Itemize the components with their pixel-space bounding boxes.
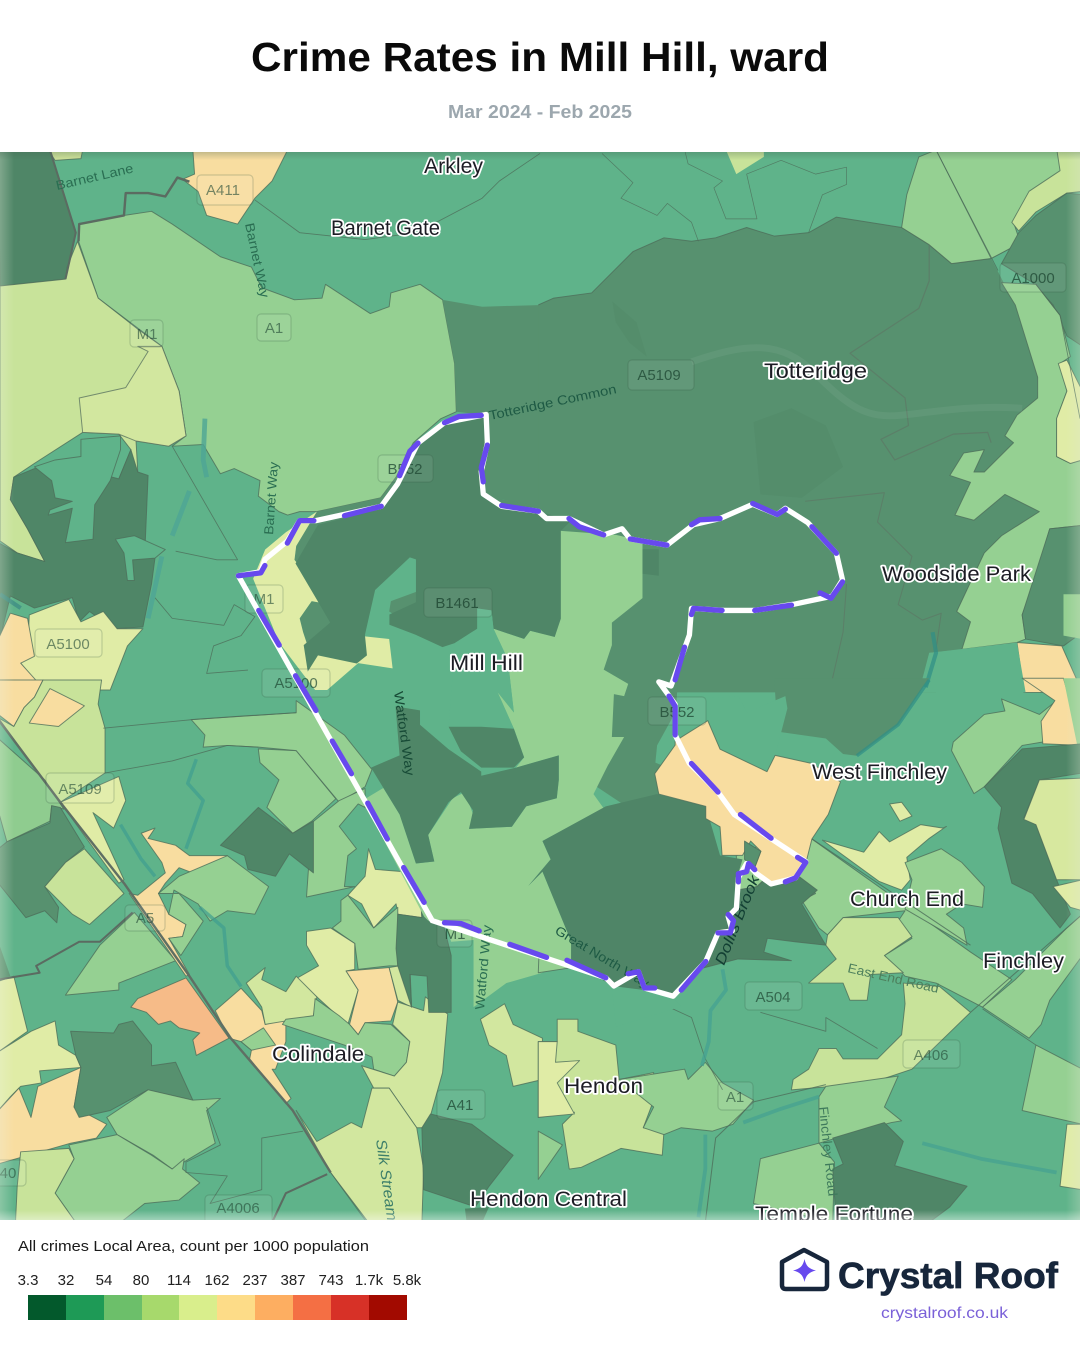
road: Dollis Brook: Dollis Brook [712, 871, 764, 967]
badge M1 [130, 320, 163, 347]
road badges [0, 175, 1066, 1225]
badge M1: M1 [445, 926, 465, 943]
badge M1: M1 [137, 326, 157, 343]
place: Hendon: Hendon [564, 1075, 643, 1098]
badge A5100: A5100 [274, 675, 318, 692]
icon: house with star [782, 1250, 827, 1289]
badge A5109: A5109 [637, 367, 681, 384]
place: Barnet Gate: Barnet Gate [331, 217, 440, 240]
badge A4006 [205, 1195, 272, 1225]
badge B552 [378, 455, 433, 482]
badge B552 [648, 697, 706, 725]
legend colour scale [28, 1295, 407, 1320]
road: Finchley Road: Finchley Road [816, 1106, 840, 1197]
badge M1 [245, 585, 283, 613]
road: Barnet Way north: Barnet Way [242, 222, 273, 300]
badge A1000: A1000 [1011, 270, 1055, 287]
badge A5100: A5100 [46, 636, 90, 653]
badge A1 [718, 1082, 753, 1110]
legend values [18, 1272, 422, 1289]
badge A504 [745, 982, 802, 1010]
road: Watford Way north: Watford Way [391, 690, 418, 777]
badge B1461 [424, 588, 492, 617]
white outline [238, 414, 843, 996]
badge B1461: B1461 [435, 595, 479, 612]
date range: Mar 2024 - Feb 2025 [448, 102, 632, 122]
badge A411: A411 [206, 182, 240, 199]
road: Great North Way: Great North Way [552, 923, 652, 991]
badge A41: A41 [447, 1097, 473, 1114]
legend title: All crimes Local Area, count per 1000 population [18, 1239, 369, 1255]
badge B552: B552 [659, 704, 695, 721]
legend values: 743 [318, 1272, 344, 1289]
website: crystalroof.co.uk [881, 1305, 1009, 1322]
badge A1: A1 [265, 320, 283, 337]
place: Mill Hill: Mill Hill [450, 652, 523, 675]
badge A1: A1 [726, 1089, 744, 1106]
legend values: 162 [204, 1272, 230, 1289]
road: Totteridge Common: Totteridge Common [488, 381, 618, 423]
legend values: 1.7k [355, 1272, 384, 1289]
place: Woodside Park: Woodside Park [882, 563, 1032, 586]
title [0, 0, 1080, 152]
legend values: 3.3 [18, 1272, 38, 1289]
legend values: 54 [96, 1272, 112, 1289]
purple dashes [238, 415, 843, 990]
badge 40: 40 [0, 1165, 16, 1182]
badge A5109 [46, 773, 114, 803]
place: Arkley: Arkley [424, 155, 483, 178]
badge A1 [257, 314, 291, 341]
badge B552: B552 [387, 461, 423, 478]
place names [272, 155, 1065, 1226]
road: Barnet Lane: Barnet Lane [54, 161, 135, 193]
place: Colindale: Colindale [272, 1043, 364, 1066]
badge A5: A5 [136, 910, 154, 927]
wordmark: Crystal Roof [838, 1255, 1059, 1296]
badge A5 [125, 905, 165, 931]
road: Barnet Way south: Barnet Way [261, 461, 281, 535]
badge A406: A406 [913, 1047, 949, 1064]
legend values: 80 [133, 1272, 149, 1289]
place: West Finchley: West Finchley [812, 761, 947, 784]
road: Watford Way south: Watford Way [472, 924, 494, 1010]
badge A1000 [1000, 263, 1066, 292]
heading: Crime Rates in Mill Hill, ward [251, 34, 829, 80]
legend values: 114 [167, 1272, 191, 1289]
badge A5109 [628, 360, 694, 390]
place: Church End: Church End [850, 888, 964, 911]
badge A4006: A4006 [216, 1200, 260, 1217]
badge A41 [437, 1090, 485, 1119]
place: Totteridge: Totteridge [764, 360, 867, 383]
legend values: 32 [58, 1272, 74, 1289]
map panel [0, 152, 1080, 1220]
place: Finchley: Finchley [983, 950, 1065, 973]
badge M1 [437, 920, 472, 947]
ward boundary [238, 414, 843, 996]
badge A5100 [35, 629, 102, 657]
badge M1: M1 [254, 591, 274, 608]
badge A504: A504 [755, 989, 791, 1006]
legend [18, 1239, 422, 1320]
road names [54, 161, 940, 1222]
badge 40 [0, 1160, 26, 1186]
legend values: 237 [242, 1272, 268, 1289]
legend values: 387 [280, 1272, 306, 1289]
road: East End Road: East End Road [846, 960, 940, 996]
legend values: 5.8k [393, 1272, 422, 1289]
place: Hendon Central: Hendon Central [470, 1188, 627, 1211]
badge A406 [903, 1040, 960, 1068]
badge A5100 [262, 669, 330, 697]
brand logo [780, 1248, 1059, 1322]
choropleth areas [0, 148, 1080, 1222]
road: Silk Stream: Silk Stream [372, 1138, 400, 1220]
badge A5109: A5109 [58, 781, 102, 798]
badge A411 [197, 175, 253, 205]
